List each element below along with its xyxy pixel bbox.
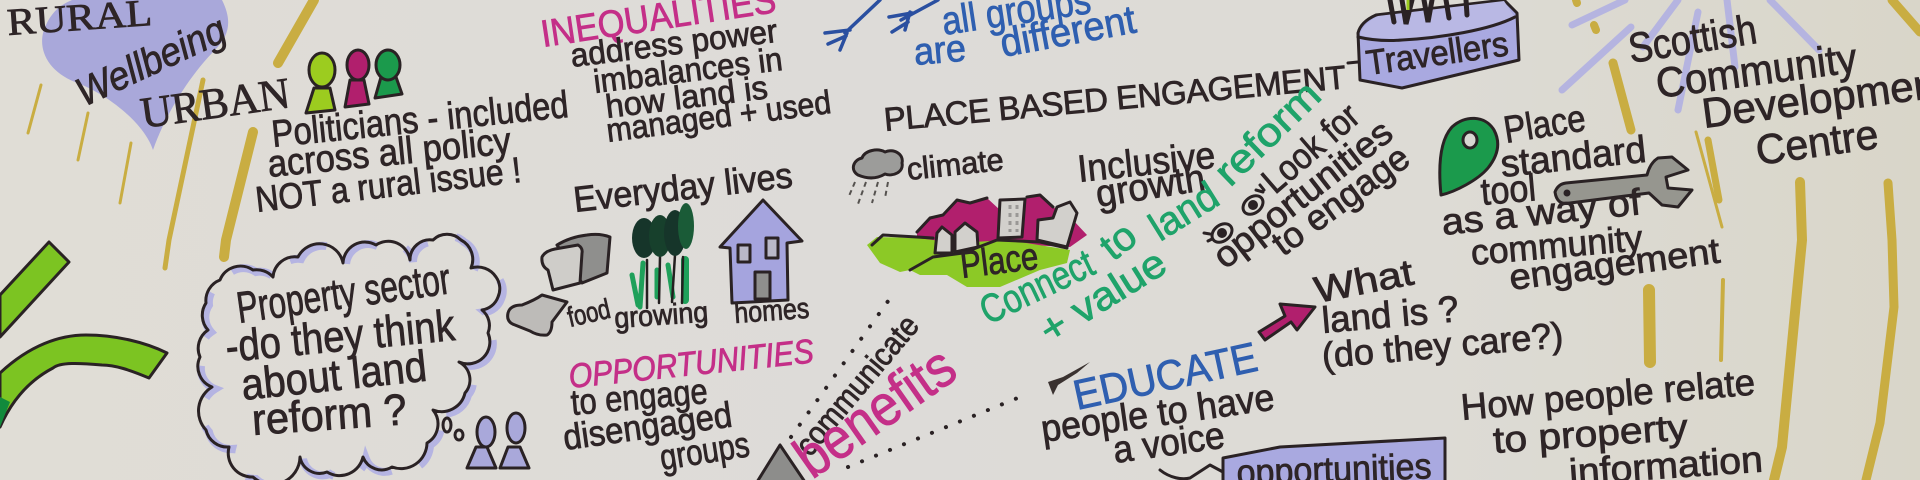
icon: place landscape: Place — [958, 236, 1041, 287]
text: look for opportunities to engage: to engage — [1264, 136, 1417, 263]
icon: map pin — [1440, 118, 1498, 195]
text: politicians: across all policy — [266, 120, 513, 186]
gold rays left — [28, 0, 314, 268]
heading: scottish community development centre: Scottish — [1625, 5, 1760, 72]
text: people to have a voice: a voice — [1110, 415, 1227, 472]
text: as a way of community engagement — [1440, 181, 1722, 298]
text: politicians — [253, 84, 570, 220]
heading: scottish community development centre: Centre — [1753, 110, 1881, 174]
icon: two lavender people — [443, 413, 529, 468]
gold rays right — [1576, 0, 1920, 480]
label: homes: homes — [733, 293, 810, 330]
icon: rain cloud — [849, 150, 902, 204]
text: all groups are different: are — [912, 28, 968, 74]
text: place standard tool: standard — [1499, 129, 1648, 186]
arrow: magenta — [1259, 304, 1315, 340]
heading: urban: URBAN — [138, 69, 293, 138]
text: as a way of community engagement: community — [1469, 217, 1644, 273]
thought cloud: property sector: about land — [239, 342, 429, 410]
thought cloud: property sector: reform ? — [250, 385, 408, 445]
heading: place based engagement: PLACE BASED ENGAGEMENT — [882, 58, 1348, 138]
text: inclusive growth: growth — [1093, 157, 1208, 216]
box: opportunities — [1160, 438, 1445, 480]
label: climate: climate — [905, 142, 1005, 187]
label: food: food — [564, 293, 613, 333]
label: wellbeing: Wellbeing — [69, 8, 233, 115]
heading: educate: EDUCATE — [1069, 333, 1262, 419]
label: growing: growing — [613, 297, 709, 335]
icon: travellers cylinder: Travellers — [1364, 24, 1511, 83]
thought cloud: property sector: Property sector — [234, 254, 453, 333]
text: to engage disengaged groups — [560, 370, 752, 478]
text: place standard tool — [1479, 98, 1648, 214]
text: inclusive growth: Inclusive — [1076, 135, 1217, 191]
heading: everyday lives: Everyday lives — [571, 154, 794, 220]
icon: hammer mark — [1048, 362, 1090, 395]
icon: three people — [306, 50, 402, 113]
lavender heart — [42, 0, 228, 150]
icon: eyes — [1204, 185, 1267, 246]
text: address power imbalances: imbalances in — [591, 40, 784, 100]
text: to engage disengaged groups: disengaged — [560, 394, 734, 458]
text: inclusive growth — [1076, 135, 1217, 216]
icon: grey megaphone triangle — [757, 445, 805, 480]
text: place standard tool: tool — [1479, 167, 1538, 214]
text: what land is — [1311, 251, 1565, 376]
text: address power imbalances — [568, 12, 833, 149]
text: as a way of community engagement: as a way of — [1440, 181, 1643, 243]
text: look for opportunities to engage: opportunities — [1205, 111, 1400, 276]
text: how people relate to property information: to property — [1492, 406, 1690, 461]
text: to engage disengaged groups: to engage — [569, 370, 709, 423]
text: communicate: communicate — [788, 308, 926, 462]
text: how people relate to property information — [1459, 361, 1764, 480]
text: connect to land reform + value: Connect — [973, 241, 1101, 333]
text: what land is: (do they care?) — [1320, 314, 1565, 376]
text: address power imbalances: managed + used — [604, 83, 833, 149]
icon: bread loaf and slice — [508, 234, 610, 335]
text: what land is: What — [1311, 251, 1418, 311]
icon: place landscape — [867, 195, 1087, 287]
thought cloud: property sector: -do they think — [223, 301, 458, 372]
text: people to have a voice: people to have — [1038, 377, 1277, 451]
text: what land is: land is ? — [1320, 288, 1460, 341]
text: politicians: NOT a rural issue ! — [253, 149, 523, 220]
lavender rays — [1562, 0, 1819, 110]
text: place standard tool: Place — [1501, 98, 1588, 152]
blue arrows — [825, 0, 938, 50]
heading: scottish community development centre: Community — [1653, 34, 1859, 107]
dotted beam — [791, 297, 1020, 467]
text: all groups are different — [912, 0, 1139, 74]
icon: travellers cylinder — [1348, 0, 1519, 88]
text: look for opportunities to engage: Look for — [1253, 95, 1367, 201]
text: as a way of community engagement: engagement — [1507, 230, 1722, 298]
text: to engage disengaged groups: groups — [657, 423, 752, 478]
text: connect to land reform + value: + value — [1031, 241, 1174, 353]
heading: opportunities: OPPORTUNITIES — [567, 332, 816, 396]
icon: crops — [632, 203, 694, 308]
text: politicians: Politicians - included — [270, 84, 570, 156]
text: connect to land reform + value: to — [1091, 213, 1145, 269]
text: connect to land reform + value: reform — [1206, 73, 1330, 194]
heading: scottish community development centre — [1625, 5, 1920, 174]
text: connect to land reform + value: land — [1141, 174, 1227, 250]
text: connect to land reform + value — [973, 73, 1330, 353]
text: address power imbalances: how land is — [603, 68, 770, 125]
icon: spanner — [1555, 157, 1692, 207]
icon: house — [720, 200, 802, 303]
text: address power imbalances: address power — [568, 12, 779, 74]
text: how people relate to property information: How people relate — [1459, 361, 1757, 428]
thought cloud: property sector — [198, 234, 503, 480]
green arrows left — [0, 242, 167, 427]
